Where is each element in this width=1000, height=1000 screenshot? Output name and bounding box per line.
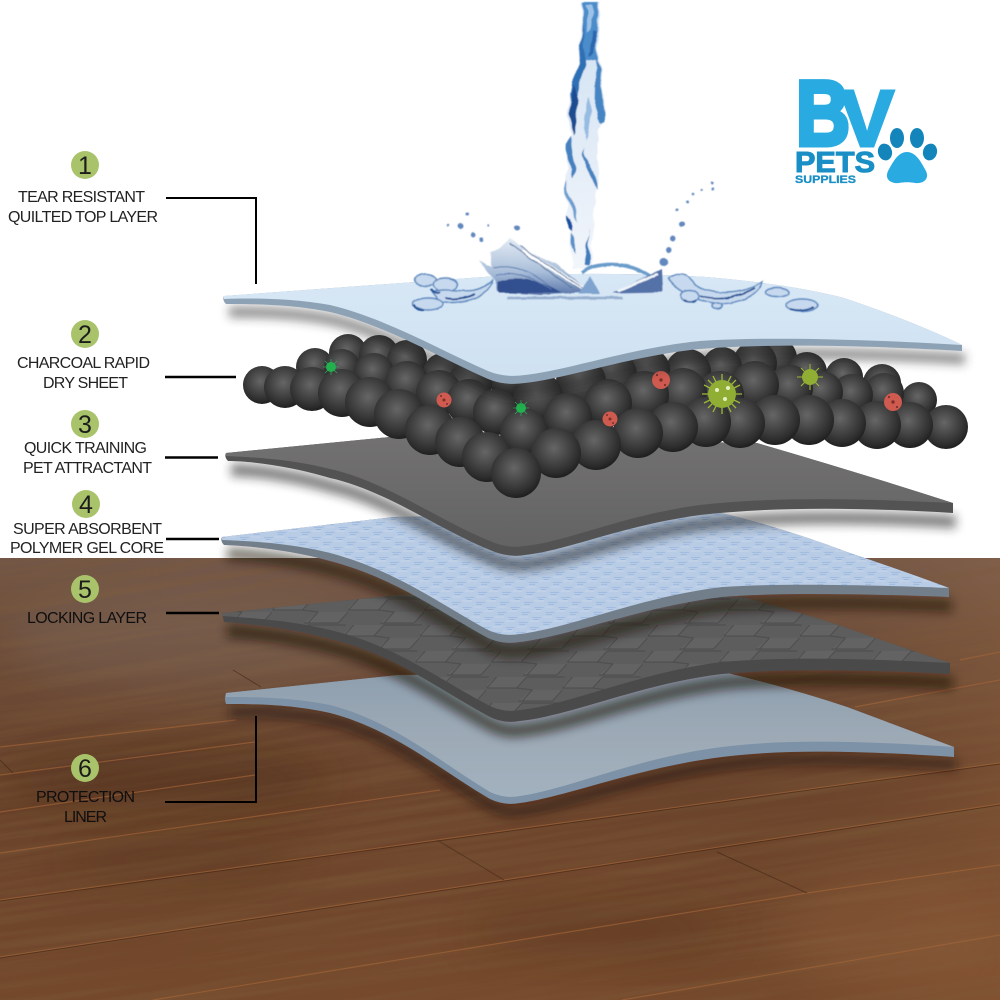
label text 6	[36, 789, 135, 826]
germ: green small middle	[513, 400, 529, 416]
label text 3: PET ATTRACTANT	[23, 460, 152, 477]
water stream	[565, 3, 604, 268]
badge 3	[71, 410, 99, 439]
label text 4: POLYMER GEL CORE	[10, 540, 164, 557]
germs on spheres	[323, 359, 902, 426]
label text 3	[23, 440, 152, 477]
puddle right	[668, 274, 818, 311]
badge 6: 6	[78, 755, 92, 783]
germ: red right	[884, 393, 902, 411]
leader line 5	[166, 612, 219, 614]
label text 4: SUPER ABSORBENT	[13, 521, 162, 538]
splash arch	[582, 264, 650, 276]
badge 2: 2	[78, 321, 92, 349]
leader line 2	[165, 376, 236, 378]
badge 5: 5	[78, 576, 92, 604]
water splash	[413, 182, 818, 311]
puddle left	[413, 274, 492, 310]
label 5	[27, 575, 219, 627]
droplets	[447, 182, 714, 266]
germ: red left	[436, 392, 452, 408]
badge 4	[72, 490, 100, 519]
logo letter V: V	[840, 74, 894, 163]
badge 2	[71, 320, 99, 349]
leader line 1	[166, 198, 256, 284]
label text 6: PROTECTION	[36, 789, 135, 806]
label text 1: TEAR RESISTANT	[18, 189, 145, 206]
badge 1: 1	[78, 152, 92, 180]
badge 4: 4	[79, 491, 93, 519]
label text 4	[10, 521, 164, 557]
wood floor	[0, 558, 1000, 1000]
layer 4: super absorbent polymer gel core	[221, 513, 952, 652]
logo word PETS: PETS	[795, 147, 875, 179]
logo: BV Pets Supplies	[795, 63, 939, 186]
label 1	[8, 151, 256, 284]
layer 5: locking layer	[222, 595, 953, 731]
germ: red centre	[602, 412, 618, 426]
layer 1: tear resistant top layer	[223, 274, 965, 392]
layer 6: protection liner	[225, 673, 957, 812]
icon: paw	[876, 128, 939, 183]
logo letter B: B	[796, 63, 850, 165]
label 3	[23, 410, 218, 477]
label text 6: LINER	[64, 809, 107, 826]
label text 2: CHARCOAL RAPID	[17, 355, 150, 372]
label text 2: DRY SHEET	[43, 375, 128, 392]
label 6	[36, 716, 256, 826]
label 4	[10, 490, 219, 557]
badge 5	[71, 575, 99, 604]
germ: red upper	[652, 371, 670, 389]
label text 5: LOCKING LAYER	[27, 610, 147, 627]
leader line 4	[166, 538, 219, 540]
badge 3: 3	[78, 411, 92, 439]
logo word SUPPLIES: SUPPLIES	[795, 174, 856, 186]
leader line 3	[165, 456, 218, 459]
label text 3: QUICK TRAINING	[24, 440, 147, 457]
layer 2: charcoal spheres	[243, 334, 968, 498]
badge 1	[71, 151, 99, 180]
label text 1	[8, 189, 158, 226]
label 2	[17, 320, 236, 392]
splash right wave	[613, 269, 663, 293]
layer 3: quick training pet attractant	[225, 437, 956, 565]
splash crown	[478, 238, 663, 298]
label text 2	[17, 355, 150, 392]
badge 6	[71, 754, 99, 783]
label text 1: QUILTED TOP LAYER	[8, 209, 158, 226]
germ: green medium	[797, 364, 823, 390]
leader line 6	[165, 716, 256, 802]
germ: large green	[702, 374, 742, 414]
germ: green small left	[323, 359, 339, 375]
